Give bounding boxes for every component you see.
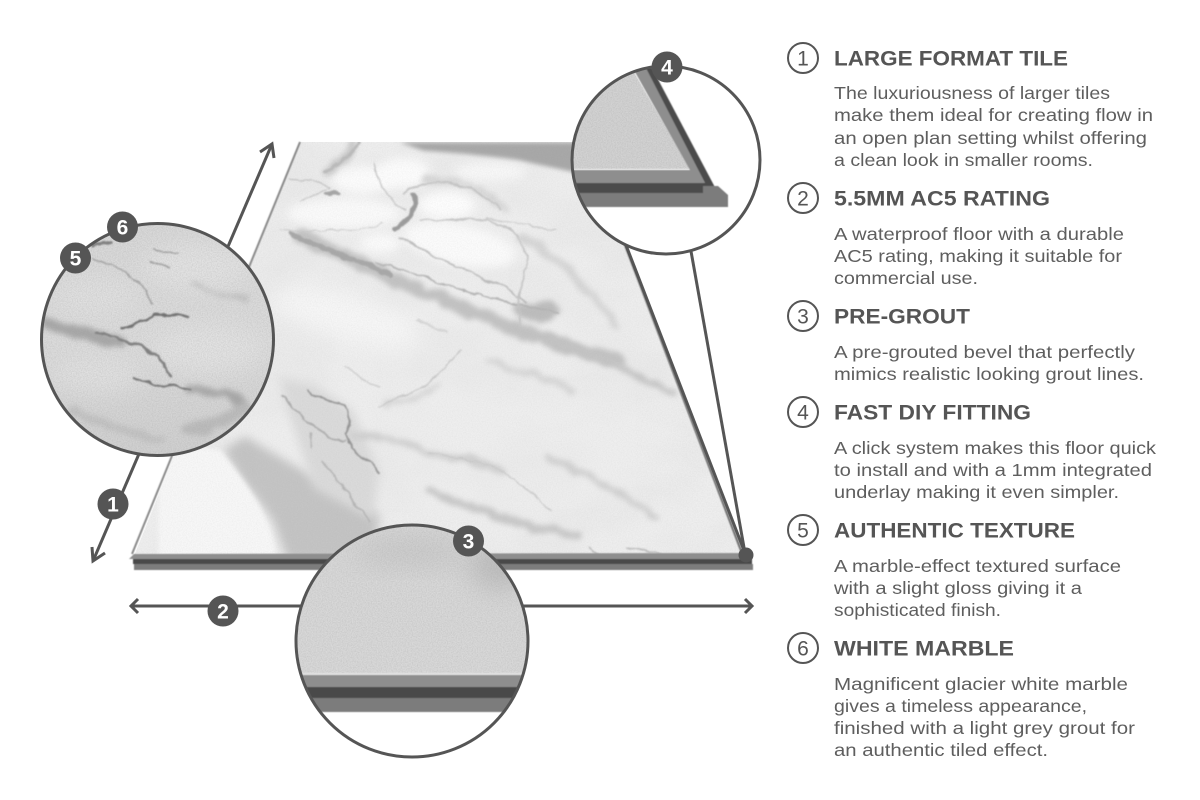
badge 6 (107, 212, 138, 242)
feature 6: white marble: an authentic tiled effect. (834, 740, 1048, 760)
feature 3: pre-grout: 3 (797, 306, 809, 328)
badge 3 (453, 526, 484, 556)
feature 4: fast DIY fitting (788, 397, 1156, 502)
feature 4: fast DIY fitting: 4 (797, 402, 809, 424)
feature 2: 5.5mm AC5 rating: 5.5MM AC5 RATING (834, 186, 1050, 210)
badge 4 (652, 52, 682, 82)
feature 1: large format tile: an open plan setting whilst offering (834, 128, 1147, 148)
feature 2: 5.5mm AC5 rating: 2 (797, 188, 809, 210)
feature 1: large format tile: LARGE FORMAT TILE (834, 46, 1068, 70)
feature 2: 5.5mm AC5 rating: A waterproof floor with a durable (834, 224, 1124, 244)
feature 3: pre-grout: mimics realistic looking grout lines. (834, 364, 1144, 384)
feature 4: fast DIY fitting: underlay making it even simpler. (834, 482, 1119, 502)
lower veins (159, 340, 672, 564)
arrow 1: tile length (92, 144, 274, 561)
feature 5: authentic texture (788, 515, 1121, 620)
feature 4: fast DIY fitting: to install and with a 1mm integrated (834, 460, 1152, 480)
feature 6: white marble: gives a timeless appearance, (834, 696, 1087, 716)
feature 5: authentic texture: AUTHENTIC TEXTURE (834, 518, 1075, 542)
feature 1: large format tile: a clean look in smaller rooms. (834, 150, 1093, 170)
badge 2: 2 (217, 600, 229, 624)
feature 2: 5.5mm AC5 rating: AC5 rating, making it suitable for (834, 246, 1122, 266)
corner marker dot (738, 548, 754, 562)
badge 5: 5 (70, 248, 82, 270)
badge 6: 6 (117, 216, 128, 240)
feature 6: white marble (788, 633, 1135, 760)
feature 1: large format tile: make them ideal for creating flow in (834, 105, 1153, 125)
badge 4: 4 (661, 56, 673, 80)
feature 6: white marble: Magnificent glacier white marble (834, 674, 1128, 694)
feature 6: white marble: 6 (797, 638, 809, 660)
feature 4: fast DIY fitting: FAST DIY FITTING (834, 400, 1031, 424)
badge 5 (60, 242, 91, 274)
feature 2: 5.5mm AC5 rating: commercial use. (834, 268, 978, 288)
upper veins (270, 142, 617, 360)
detail circle: pre-grout bevel (290, 520, 535, 757)
tile edge profile (129, 142, 753, 570)
badge 2 (208, 596, 238, 626)
feature 1: large format tile: 1 (797, 48, 809, 70)
feature 5: authentic texture: sophisticated finish. (834, 600, 1001, 620)
feature 3: pre-grout: PRE-GROUT (834, 304, 970, 328)
feature 5: authentic texture: A marble-effect textured surface (834, 556, 1121, 576)
feature 5: authentic texture: with a slight gloss giving it a (833, 578, 1082, 598)
badge 3: 3 (463, 530, 474, 554)
feature 3: pre-grout (788, 301, 1144, 384)
feature 1: large format tile: The luxuriousness of larger tiles (834, 83, 1110, 103)
feature 2: 5.5mm AC5 rating (788, 183, 1124, 288)
detail circle: marble texture (40, 220, 276, 460)
feature 1: large format tile (788, 43, 1153, 170)
feature 5: authentic texture: 5 (797, 520, 809, 542)
feature 4: fast DIY fitting: A click system makes this floor quick (834, 438, 1156, 458)
badge 1 (98, 488, 128, 520)
detail circle: corner click profile (560, 60, 760, 254)
feature 3: pre-grout: A pre-grouted bevel that perfectly (834, 342, 1135, 362)
feature 6: white marble: finished with a light grey grout for (834, 718, 1135, 738)
arrow 2: tile width (131, 599, 752, 613)
marble floor tile (120, 142, 760, 570)
feature 6: white marble: WHITE MARBLE (834, 636, 1014, 660)
leader lines to corner detail (624, 240, 745, 553)
badge 1: 1 (107, 494, 119, 516)
